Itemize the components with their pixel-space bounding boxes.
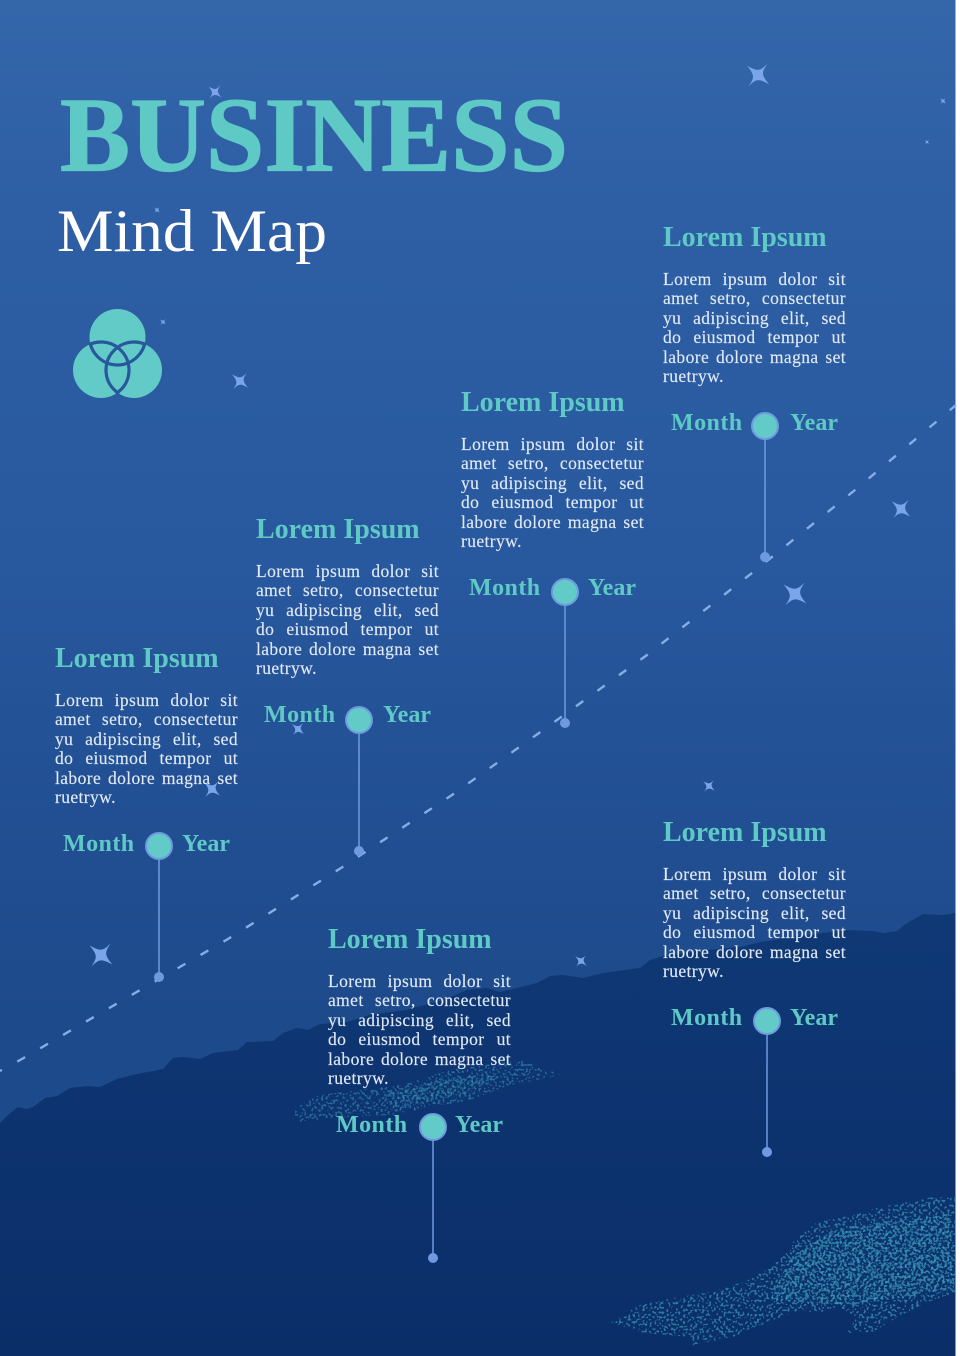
text block: labore dolore magna set [663, 346, 846, 366]
text block: do eiusmod tempor ut [461, 492, 644, 512]
pin marker [751, 412, 779, 562]
text block: Lorem ipsum dolor sit [328, 970, 511, 990]
star field [80, 55, 949, 976]
text block: amet setro, consectetur [328, 990, 511, 1010]
year label: Year [790, 410, 838, 436]
text block: amet setro, consectetur [55, 709, 238, 729]
month label: Month [63, 831, 135, 857]
text block: yu adipiscing elit, sed [461, 472, 644, 492]
text block: Lorem ipsum dolor sit [256, 560, 439, 580]
text block [55, 690, 238, 808]
text block: ruetryw. [55, 787, 116, 807]
text block: ruetryw. [461, 531, 522, 551]
text block: ruetryw. [256, 658, 317, 678]
text block: yu adipiscing elit, sed [663, 902, 846, 922]
pin marker [753, 1007, 781, 1157]
month label: Month [671, 410, 743, 436]
heading: Lorem Ipsum [55, 643, 219, 674]
year label: Year [455, 1112, 503, 1138]
month label: Month [336, 1112, 408, 1138]
text block: amet setro, consectetur [461, 453, 644, 473]
text block: yu adipiscing elit, sed [55, 728, 238, 748]
dotted texture: lower right [610, 1197, 955, 1345]
text block [461, 434, 644, 552]
pin marker [419, 1113, 447, 1263]
heading: Lorem Ipsum [256, 514, 420, 545]
text block: amet setro, consectetur [663, 288, 846, 308]
text block [328, 970, 511, 1088]
text block: Lorem ipsum dolor sit [461, 434, 644, 454]
panel: milestone 1 [55, 643, 238, 982]
panel: milestone 4 [663, 222, 846, 562]
pin marker [345, 706, 373, 856]
text block: Lorem ipsum dolor sit [663, 864, 846, 884]
text block: Lorem ipsum dolor sit [663, 268, 846, 288]
panel: milestone 6 [663, 817, 846, 1157]
text block: labore dolore magna set [55, 768, 238, 788]
subtitle: Mind Map [57, 198, 327, 264]
text block: yu adipiscing elit, sed [663, 308, 846, 328]
text block: amet setro, consectetur [663, 883, 846, 903]
icon: three overlapping circles [73, 309, 162, 398]
panel: milestone 5 [328, 924, 511, 1263]
panel: milestone 2 [256, 514, 439, 856]
dotted texture: centre [293, 1060, 562, 1122]
text block: ruetryw. [663, 366, 724, 386]
text block: labore dolore magna set [663, 942, 846, 962]
year label: Year [182, 831, 230, 857]
text block: ruetryw. [663, 961, 724, 981]
text block: labore dolore magna set [461, 512, 644, 532]
text block: do eiusmod tempor ut [328, 1029, 511, 1049]
text block: labore dolore magna set [256, 638, 439, 658]
text block: labore dolore magna set [328, 1048, 511, 1068]
year label: Year [588, 575, 636, 601]
pin marker [145, 832, 173, 982]
text block: do eiusmod tempor ut [663, 922, 846, 942]
heading: Lorem Ipsum [461, 387, 625, 418]
dashed diagonal timeline [0, 405, 956, 1071]
month label: Month [671, 1005, 743, 1031]
month label: Month [264, 702, 336, 728]
heading: Lorem Ipsum [663, 817, 827, 848]
heading: Lorem Ipsum [663, 222, 827, 253]
month label: Month [469, 575, 541, 601]
text block: do eiusmod tempor ut [55, 748, 238, 768]
text block: yu adipiscing elit, sed [256, 600, 439, 620]
text block: do eiusmod tempor ut [663, 327, 846, 347]
text block: ruetryw. [328, 1068, 389, 1088]
text block: do eiusmod tempor ut [256, 619, 439, 639]
pin marker [551, 578, 579, 728]
mountain silhouette [0, 913, 956, 1356]
year label: Year [790, 1005, 838, 1031]
text block [256, 560, 439, 678]
text block [663, 864, 846, 982]
text block: yu adipiscing elit, sed [328, 1010, 511, 1030]
year label: Year [383, 702, 431, 728]
text block: amet setro, consectetur [256, 580, 439, 600]
text block [663, 268, 846, 386]
panel: milestone 3 [461, 387, 644, 728]
heading: Lorem Ipsum [328, 924, 492, 955]
text block: Lorem ipsum dolor sit [55, 690, 238, 710]
title: BUSINESS [60, 76, 568, 190]
